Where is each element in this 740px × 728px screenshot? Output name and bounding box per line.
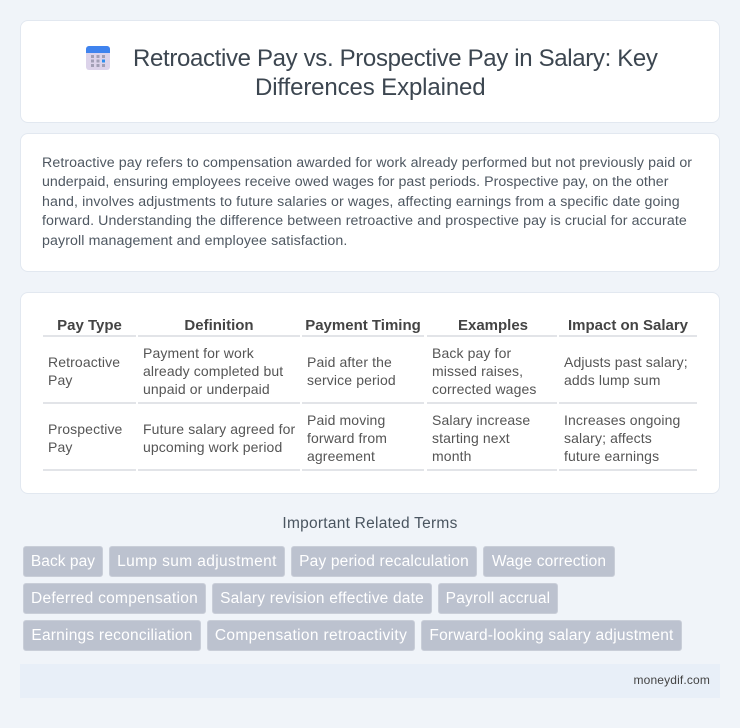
table row: prospective pay: Future salary agreed for bbox=[143, 421, 295, 437]
tag list: related terms: Earnings reconciliation bbox=[31, 627, 193, 644]
tag list: related terms bbox=[23, 546, 682, 651]
table row: prospective pay bbox=[48, 412, 680, 464]
table row: retroactive pay: Back pay for bbox=[432, 345, 511, 361]
table row: prospective pay: Increases ongoing bbox=[564, 412, 680, 428]
text block: introduction card: underpaid, ensuring employees receive owed wages for past periods. Prospective pay, on the other bbox=[42, 174, 668, 190]
footer bar bbox=[20, 664, 720, 698]
text block: introduction card bbox=[20, 133, 720, 272]
table row: prospective pay: Salary increase bbox=[432, 412, 530, 428]
table row: prospective pay: Prospective bbox=[48, 421, 122, 437]
panel: title card bbox=[20, 20, 720, 123]
title bbox=[133, 45, 658, 101]
panel: comparison table bbox=[20, 292, 720, 494]
table header bbox=[57, 317, 688, 334]
text block: introduction card: forward. Understanding the difference between retroactive and prospective pay is crucial for accurate bbox=[42, 213, 687, 229]
table row: retroactive pay: unpaid or underpaid bbox=[143, 381, 270, 397]
tag list: related terms: Compensation retroactivity bbox=[215, 627, 407, 644]
title: Retroactive Pay vs. Prospective Pay in Salary: Key bbox=[133, 45, 658, 72]
table row: retroactive pay: Retroactive bbox=[48, 354, 120, 370]
table header: Impact on Salary bbox=[568, 317, 688, 334]
table row: retroactive pay: Pay bbox=[48, 372, 72, 388]
table row: prospective pay: Paid moving bbox=[307, 412, 385, 428]
text block: introduction card: payroll management and employee satisfaction. bbox=[42, 233, 347, 249]
table row: retroactive pay bbox=[48, 345, 688, 397]
table row: retroactive pay: service period bbox=[307, 372, 396, 388]
tag list: related terms: Deferred compensation bbox=[31, 590, 198, 607]
table row: prospective pay: salary; affects bbox=[564, 430, 652, 446]
table row: prospective pay: forward from bbox=[307, 430, 387, 446]
title: Differences Explained bbox=[255, 74, 486, 101]
table header: Examples bbox=[458, 317, 528, 334]
table row: prospective pay: month bbox=[432, 448, 472, 464]
footer source: moneydif.com bbox=[634, 673, 710, 687]
table header: Payment Timing bbox=[305, 317, 421, 334]
tag list: related terms: Wage correction bbox=[492, 553, 606, 570]
text block: introduction card: hand, involves adjustments to future salaries or wages, affecting earnings from a specific date going bbox=[42, 194, 680, 210]
tag list: related terms: Forward-looking salary adjustment bbox=[429, 627, 674, 644]
table row: prospective pay: upcoming work period bbox=[143, 439, 282, 455]
tag list: related terms: Lump sum adjustment bbox=[117, 553, 277, 570]
table row: retroactive pay: Payment for work bbox=[143, 345, 254, 361]
table row: prospective pay: future earnings bbox=[564, 448, 659, 464]
table row: retroactive pay: corrected wages bbox=[432, 381, 537, 397]
text block: introduction card: Retroactive pay refers to compensation awarded for work already performed but not previously paid or bbox=[42, 155, 692, 171]
heading: important related terms: Important Related Terms bbox=[282, 515, 458, 532]
table row: prospective pay: agreement bbox=[307, 448, 375, 464]
table row: retroactive pay: already completed but bbox=[143, 363, 283, 379]
table row: retroactive pay: Paid after the bbox=[307, 354, 392, 370]
table row: retroactive pay: missed raises, bbox=[432, 363, 523, 379]
table row: prospective pay: starting next bbox=[432, 430, 510, 446]
table row: retroactive pay: Adjusts past salary; bbox=[564, 354, 688, 370]
tag list: related terms: Payroll accrual bbox=[446, 590, 550, 607]
tag list: related terms: Pay period recalculation bbox=[299, 553, 469, 570]
table header: Pay Type bbox=[57, 317, 122, 334]
table row: prospective pay: Pay bbox=[48, 439, 72, 455]
table row: retroactive pay: adds lump sum bbox=[564, 372, 660, 388]
icon: calendar bbox=[86, 46, 110, 70]
tag list: related terms: Back pay bbox=[31, 553, 95, 570]
table header: Definition bbox=[184, 317, 254, 334]
tag list: related terms: Salary revision effective date bbox=[220, 590, 424, 607]
